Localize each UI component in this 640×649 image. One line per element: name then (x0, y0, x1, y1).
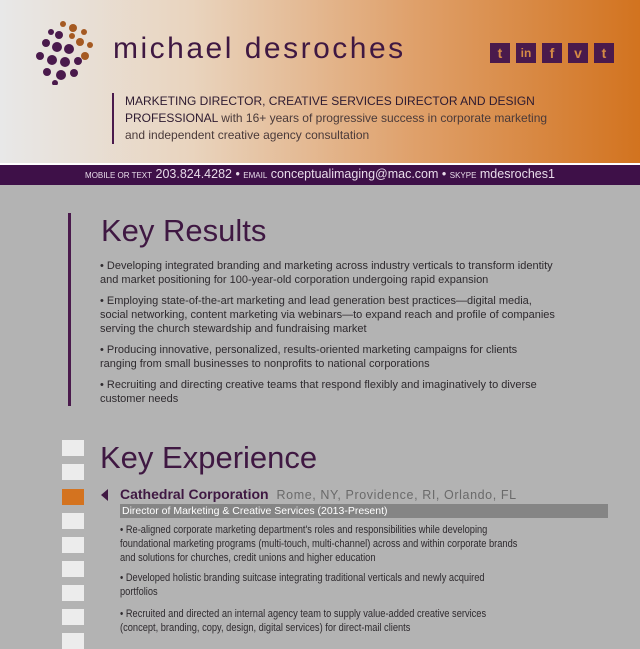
role bar: Director of Marketing & Creative Services (2013-Present) (122, 505, 388, 517)
header banner (0, 0, 640, 163)
results bullets: • Producing innovative, personalized, results-oriented marketing campaigns for clients ranging from small businesses to nonprofits to national corporations (100, 344, 517, 370)
social icons: t (498, 45, 502, 61)
social icons: v (574, 45, 582, 61)
experience bullets: • Developed holistic branding suitcase integrating traditional verticals and newly acquired (120, 572, 485, 584)
company line: Cathedral Corporation Rome, NY, Providence, RI, Orlando, FL (120, 486, 517, 502)
results bullets: • Developing integrated branding and marketing across industry verticals to transform identity and market positioning for 100-year-old corporation undergoing rapid expansion (100, 260, 553, 286)
tagline: MARKETING DIRECTOR, CREATIVE SERVICES DIRECTOR AND DESIGN PROFESSIONAL with 16+ years of progressive success in corporate marketing and independent creative agency consultation (125, 94, 547, 142)
role bar (120, 504, 608, 518)
experience bullets: • Re-aligned corporate marketing department's roles and responsibilities while developing foundational marketing programs (multi-touch, multi-channel) across and within corporate brands and solutions for churches, credit unions and higher education (120, 524, 517, 564)
experience bullets: • Recruited and directed an internal agency team to supply value-added creative services (concept, branding, copy, design, digital services) for direct-mail clients (120, 608, 486, 634)
experience bullets: portfolios (120, 586, 158, 598)
name: michael desroches (113, 32, 406, 65)
social icons: in (521, 46, 531, 60)
social icons: f (550, 45, 554, 61)
heading: key results: Key Results (101, 213, 266, 248)
experience bullets (120, 524, 518, 634)
results bullets (100, 260, 555, 405)
key results section (68, 213, 571, 406)
logo dots (36, 21, 93, 85)
results bullets: • Employing state-of-the-art marketing and lead generation best practices—digital media, social networking, content marketing via webinars—to expand reach and profile of companies serving the church stewardship and fundraising market (100, 295, 555, 335)
social icons: t (602, 45, 606, 61)
contact bar: MOBILE OR TEXT 203.824.4282 • EMAIL conceptualimaging@mac.com • SKYPE mdesroches1 (85, 167, 555, 181)
timeline squares (62, 440, 84, 649)
results bullets: • Recruiting and directing creative teams that respond flexibly and imaginatively to diverse customer needs (100, 379, 537, 405)
arrow marker (101, 489, 108, 501)
social icons (490, 43, 614, 63)
heading: key experience: Key Experience (100, 440, 317, 475)
contact bar (0, 163, 640, 185)
